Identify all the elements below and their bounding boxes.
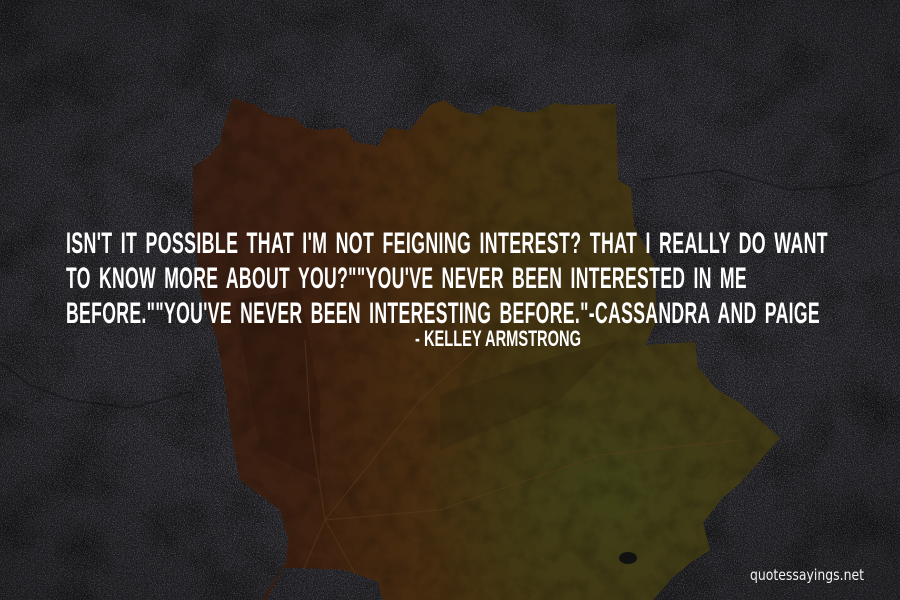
author attribution: - KELLEY ARMSTRONG <box>415 326 581 351</box>
background cracks <box>0 170 900 408</box>
leaf veins <box>304 340 740 574</box>
leaf dark shading on left lobe <box>302 304 316 376</box>
leaf shadow fold <box>440 407 454 448</box>
watermark: quotessayings.net <box>750 566 864 584</box>
leaf hole <box>619 552 637 564</box>
quote text <box>66 227 828 330</box>
autumn leaf <box>180 90 790 600</box>
